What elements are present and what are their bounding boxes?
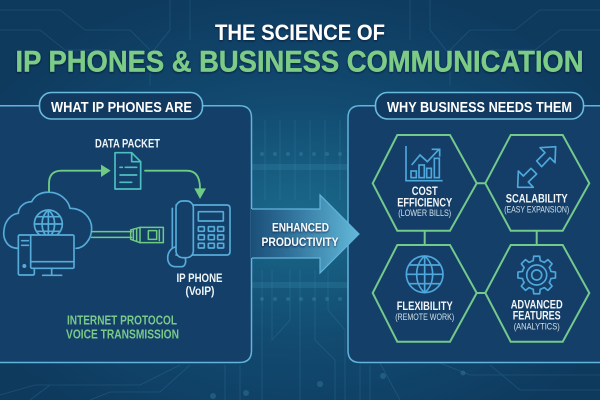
label: data packet: DATA PACKET xyxy=(95,138,160,150)
heading pill: why business needs them xyxy=(376,92,584,119)
text: scalability: (EASY EXPANSION) xyxy=(504,204,569,214)
icon: cloud with globe and computer xyxy=(4,192,92,275)
label: IP phone (VoIP) xyxy=(176,273,223,298)
text: cost efficiency xyxy=(397,186,452,218)
title: THE SCIENCE OF xyxy=(215,20,385,45)
text: advanced features: ADVANCED xyxy=(511,299,563,311)
text: cost efficiency: COST xyxy=(412,186,438,198)
caption: internet protocol voice transmission: INTERNET PROTOCOL xyxy=(67,314,177,328)
hexagon: flexibility xyxy=(373,245,477,342)
hexagon: cost efficiency xyxy=(373,135,477,231)
heading pill: what IP phones are xyxy=(40,92,202,119)
network diagram xyxy=(4,153,230,275)
label: IP phone (VoIP): (VoIP) xyxy=(186,286,215,298)
text: scalability xyxy=(504,194,569,214)
panel: what IP phones are xyxy=(0,92,252,362)
heading pill: what IP phones are: WHAT IP PHONES ARE xyxy=(51,100,192,116)
text: advanced features: FEATURES xyxy=(513,311,561,323)
text: flexibility xyxy=(395,301,454,322)
icon: rising bar chart xyxy=(406,146,443,181)
icon: document xyxy=(115,153,141,189)
icon: globe xyxy=(406,256,443,293)
icon: IP desk phone xyxy=(168,201,230,267)
text: scalability: SCALABILITY xyxy=(506,194,568,206)
text: flexibility: FLEXIBILITY xyxy=(397,301,453,313)
text: flexibility: (REMOTE WORK) xyxy=(395,312,454,322)
caption: internet protocol voice transmission: VOICE TRANSMISSION xyxy=(66,328,179,342)
text: advanced features xyxy=(511,299,563,332)
label: IP phone (VoIP): IP PHONE xyxy=(176,273,223,285)
title xyxy=(16,20,584,78)
arrow: cloud to packet xyxy=(49,165,111,192)
arrow: packet to phone xyxy=(145,171,206,199)
caption: internet protocol voice transmission xyxy=(66,314,179,342)
icon: ethernet cable xyxy=(92,227,163,243)
heading pill: why business needs them: WHY BUSINESS NEEDS THEM xyxy=(387,100,572,116)
panel: why business needs them xyxy=(348,92,600,362)
icon: gear xyxy=(518,256,555,294)
hexagon: scalability xyxy=(485,135,589,231)
hexagon connectors xyxy=(425,183,537,293)
arrow: enhanced productivity: ENHANCED xyxy=(272,221,329,235)
arrow: enhanced productivity xyxy=(251,195,359,273)
icon: expand arrows xyxy=(518,147,556,187)
text: cost efficiency: (LOWER BILLS) xyxy=(398,208,451,218)
text: cost efficiency: EFFICIENCY xyxy=(397,198,452,210)
hexagon: advanced features xyxy=(485,245,589,342)
arrow: enhanced productivity: PRODUCTIVITY xyxy=(262,235,338,249)
text: advanced features: (ANALYTICS) xyxy=(514,322,560,332)
